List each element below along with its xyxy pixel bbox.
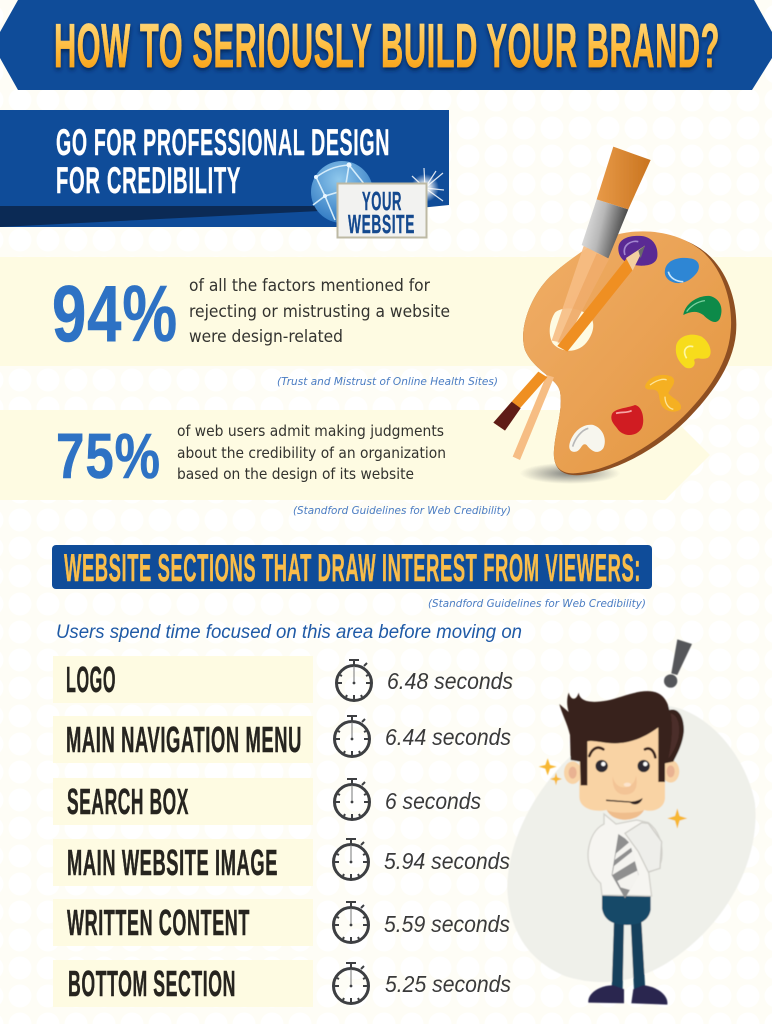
stat text [189,276,450,347]
icon: stopwatch [334,779,370,820]
legs [612,920,645,990]
paint: blue [665,258,699,283]
paint: red [611,405,643,435]
row: written content: 5.59 seconds [384,911,510,937]
row: bottom section [53,960,511,1007]
row: main website image: 5.94 seconds [384,848,510,874]
row: logo: LOGO [66,659,116,700]
paint: purple [618,236,657,266]
row: main navigation menu: 6.44 seconds [385,724,511,750]
chin shade [607,810,644,820]
your website sign: WEBSITE [348,209,415,239]
panel: 94% statistic [0,257,772,366]
brush bristles [597,147,651,209]
your website sign: YOUR [362,186,402,216]
row: search box [53,778,481,825]
raised arm [625,823,662,872]
brush handle [513,245,609,460]
heading: GO FOR PROFESSIONAL DESIGN [56,122,390,163]
row: written content [53,899,510,946]
row: search box: 6 seconds [385,788,481,814]
sparkles [539,758,687,829]
heading: FOR CREDIBILITY [56,160,241,201]
icon: stopwatch [334,963,368,1004]
eyes [595,760,650,772]
thumb hole [550,308,593,351]
stat number: 75% [56,420,161,492]
face [579,723,665,820]
stat text [177,422,446,483]
head [559,691,684,820]
row: logo [53,656,513,703]
source citation: (Standford Guidelines for Web Credibility) [293,504,511,517]
stat text: of all the factors mentioned for [189,276,430,296]
title banner [0,0,772,90]
icon: stopwatch [334,902,368,942]
stat text: based on the design of its website [177,465,414,483]
shirt and tie [588,814,662,898]
hair [559,691,684,785]
icon: globe [311,161,373,223]
row: written content: WRITTEN CONTENT [67,902,250,943]
stat text: were design-related [189,327,343,347]
panel: professional design heading [0,110,449,239]
tie [612,834,639,898]
your website sign [338,184,426,239]
icon: stopwatch [334,716,370,756]
backdrop blob [507,705,756,982]
row: search box: SEARCH BOX [67,781,189,822]
brush ferrule [582,199,628,258]
stat text: rejecting or mistrusting a website [189,302,450,322]
paint: yellow [676,335,711,368]
illustration: palette, brush and pencil [493,147,736,484]
row: bottom section: BOTTOM SECTION [68,963,236,1004]
stat text: about the credibility of an organization [177,444,446,462]
source citation: (Trust and Mistrust of Online Health Sites) [277,375,498,388]
heading [56,122,390,201]
row: bottom section: 5.25 seconds [385,971,511,997]
subheading: Users spend time focused on this area before moving on [56,622,522,643]
eyebrows [589,748,655,757]
icon: stopwatch [336,660,372,700]
shoes [588,985,667,1005]
hair sheen [668,713,679,758]
paint: green [683,296,722,322]
paint: orange [645,375,681,412]
pants [602,894,651,925]
paint: white [569,425,605,452]
row: main navigation menu: MAIN NAVIGATION MENU [66,719,302,760]
ears [564,760,679,784]
icon: stopwatch [334,839,368,880]
source citation: (Standford Guidelines for Web Credibility) [428,597,646,610]
shirt body [588,814,662,896]
nose [613,775,637,795]
row: logo: 6.48 seconds [387,668,513,694]
palette body [523,231,731,473]
illustration: thinking businessman [507,639,756,1005]
stat text: of web users admit making judgments [177,422,444,440]
palette shadow [520,463,620,484]
stat number: 94% [52,269,178,358]
icon: exclamation mark [664,639,692,688]
lower body and backdrop [507,639,756,1005]
row: main website image: MAIN WEBSITE IMAGE [67,842,278,883]
palette edge [523,233,736,475]
panel: 75% statistic [0,410,710,500]
pencil [493,246,645,431]
icon: sparkle [411,168,444,202]
mouth [606,798,643,804]
